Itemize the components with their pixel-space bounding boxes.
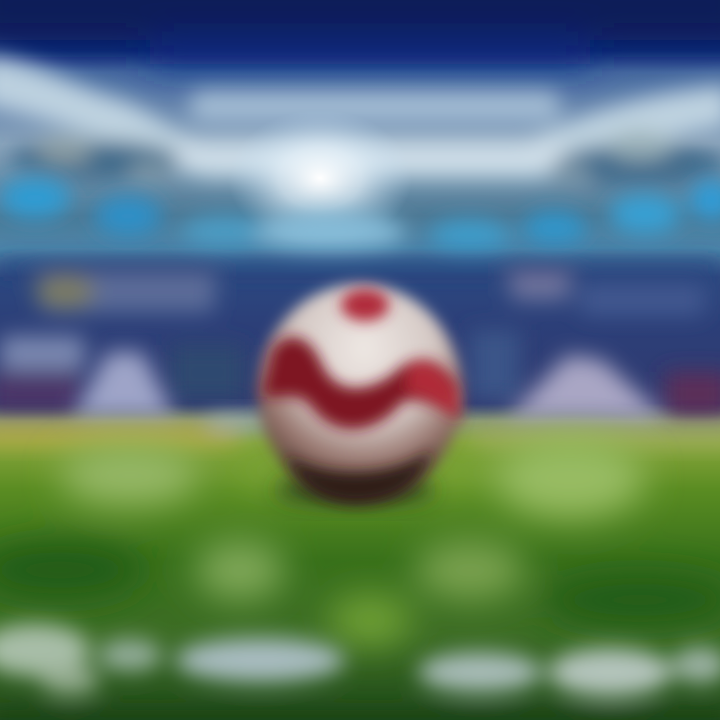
pitch edge with warm light: [0, 416, 720, 444]
ball body: [258, 284, 462, 500]
white foreground blur: [0, 624, 720, 720]
red ball markings: [262, 289, 460, 429]
white structures in the stands: [72, 352, 668, 420]
clouds and stadium roof: [0, 55, 720, 187]
ball lower shading: [285, 450, 432, 503]
stadium stands: [0, 262, 720, 416]
dark blue sky: [0, 0, 720, 64]
central floodlight glow: [228, 110, 412, 246]
grass texture: [0, 438, 720, 646]
football: [258, 284, 462, 503]
ball shadow: [275, 476, 435, 504]
bright blue stand lights: [0, 178, 720, 252]
